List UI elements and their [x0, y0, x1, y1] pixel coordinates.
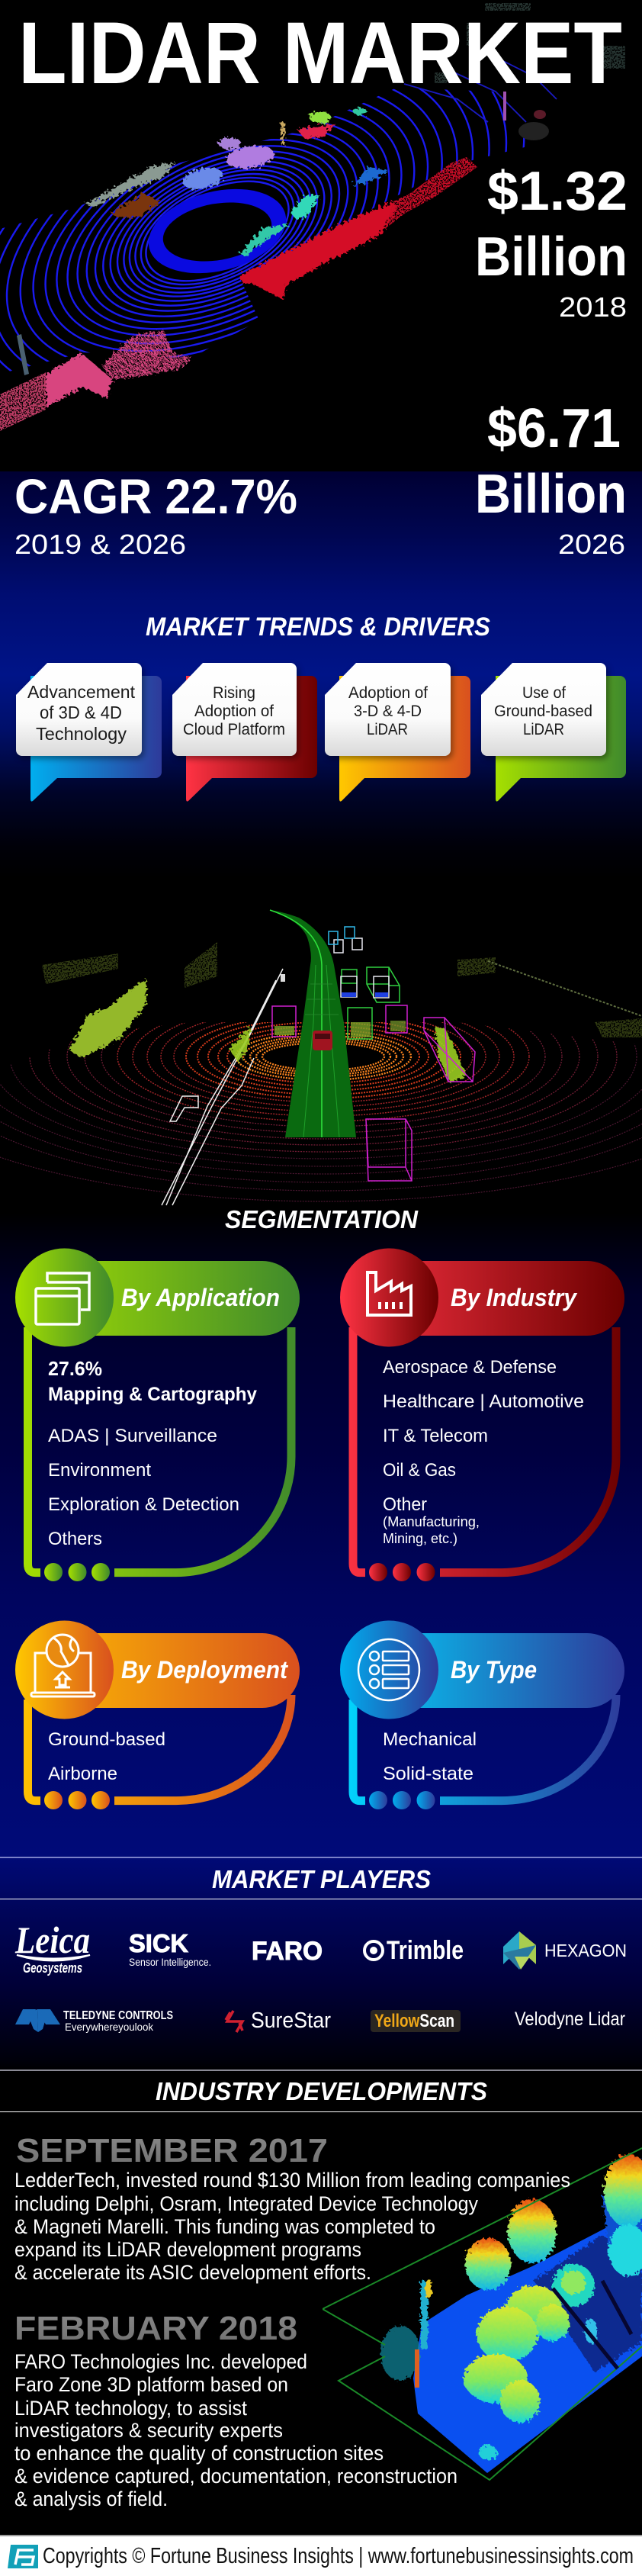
list: type segments — [383, 1729, 477, 1784]
logo: SureStar: SureStar — [251, 2008, 331, 2033]
icon: server list — [358, 1639, 419, 1700]
panel: by deployment: By Deployment — [121, 1656, 288, 1684]
lidar scene: terrain scan — [323, 2148, 642, 2480]
development: September 2017: SEPTEMBER 2017 — [16, 2132, 328, 2169]
list: industry segments: Other — [383, 1494, 427, 1515]
trend card 2 — [172, 663, 317, 802]
list: application segments: ADAS | Surveillance — [48, 1426, 217, 1446]
trend card 2: Rising — [213, 684, 255, 702]
list: industry segments: Healthcare | Automotive — [383, 1391, 584, 1412]
logo: Teledyne Controls: TELEDYNE CONTROLS — [63, 2009, 173, 2022]
development: September 2017: & Magneti Marelli. This funding was completed to — [14, 2215, 435, 2238]
stat: CAGR: CAGR 22.7% — [14, 469, 297, 524]
trend card 1 — [16, 663, 162, 802]
lidar scene: autonomous vehicle road view — [0, 910, 642, 1205]
stat: 2018 market size: 2018 — [559, 291, 627, 323]
logo: Hexagon: HEXAGON — [544, 1941, 627, 1960]
panel: by type: By Type — [451, 1656, 537, 1684]
list: industry segments: Oil & Gas — [383, 1460, 456, 1481]
logo: Trimble — [364, 1936, 464, 1965]
logo: Velodyne Lidar: Velodyne Lidar — [515, 2008, 625, 2030]
list: application segments: Others — [48, 1529, 102, 1549]
heading: industry developments: INDUSTRY DEVELOPMENTS — [156, 2077, 487, 2105]
list: application segments: Environment — [48, 1460, 151, 1481]
list: industry segments: IT & Telecom — [383, 1426, 488, 1446]
trend card 1: of 3D & 4D — [40, 703, 122, 722]
trend card 3: LiDAR — [367, 721, 408, 738]
logo: YellowScan: YellowScan — [374, 2011, 454, 2031]
stat: 2026 market size: 2026 — [558, 529, 625, 560]
stat: 2026 market size — [475, 398, 627, 560]
lidar point cloud: street top view — [0, 0, 642, 590]
stat: 2018 market size: Billion — [475, 227, 628, 288]
list: industry segments: Mining, etc.) — [383, 1531, 457, 1546]
development: February 2018: to enhance the quality of construction sites — [14, 2442, 384, 2465]
trend card 4: Use of — [522, 684, 566, 702]
development: February 2018 — [14, 2310, 457, 2510]
development: February 2018: & analysis of field. — [14, 2488, 168, 2510]
list: deployment segments — [48, 1729, 165, 1784]
trend card 3 — [325, 663, 470, 802]
development: September 2017: LedderTech, invested round $130 Million from leading companies — [14, 2169, 570, 2192]
logo: SICK: SICK — [129, 1929, 188, 1957]
list: deployment segments: Airborne — [48, 1764, 117, 1784]
development: September 2017: including Delphi, Osram, Integrated Device Technology — [14, 2192, 478, 2215]
stat: CAGR — [14, 469, 297, 560]
trend card 4 — [481, 663, 626, 802]
heading: market players: MARKET PLAYERS — [212, 1865, 431, 1893]
stat: 2018 market size — [475, 161, 628, 323]
trend card 3: 3-D & 4-D — [354, 703, 422, 720]
development: September 2017 — [14, 2132, 570, 2284]
icon: factory — [368, 1272, 411, 1315]
list: industry segments: Aerospace & Defense — [383, 1357, 557, 1378]
panel: by application: By Application — [121, 1284, 280, 1311]
list: application segments: 27.6% — [48, 1357, 102, 1380]
heading: market trends: MARKET TRENDS & DRIVERS — [146, 613, 490, 642]
footer — [0, 2535, 642, 2576]
logo: FARO: FARO — [252, 1937, 323, 1966]
development: February 2018: FARO Technologies Inc. developed — [14, 2350, 307, 2373]
list: application segments — [48, 1357, 257, 1549]
logo: SICK — [129, 1929, 211, 1968]
list: industry segments: (Manufacturing, — [383, 1514, 480, 1529]
list: industry segments — [383, 1357, 584, 1546]
trend card 4: Ground-based — [494, 703, 592, 720]
logo: Hexagon — [503, 1931, 627, 1970]
heading: segmentation: SEGMENTATION — [225, 1205, 419, 1233]
logo: Teledyne Controls: Everywhereyoulook — [65, 2021, 154, 2033]
development: February 2018: investigators & security experts — [14, 2419, 283, 2442]
trend card 2: Adoption of — [194, 703, 274, 720]
development: February 2018: FEBRUARY 2018 — [14, 2310, 297, 2347]
panel: by type — [340, 1620, 624, 1809]
stat: CAGR: 2019 & 2026 — [14, 529, 186, 560]
list: application segments: Mapping & Cartography — [48, 1384, 257, 1405]
list: deployment segments: Ground-based — [48, 1729, 165, 1750]
trend card 2: Cloud Platform — [183, 721, 285, 738]
trend card 1: Advancement — [27, 682, 136, 702]
icon: laptop with globe — [31, 1635, 95, 1696]
development: February 2018: LiDAR technology, to assist — [14, 2397, 247, 2420]
trend card 1: Technology — [36, 724, 127, 744]
logo: Trimble: Trimble — [387, 1936, 464, 1965]
stat: 2026 market size: Billion — [475, 464, 627, 525]
logo: Leica Geosystems: Geosystems — [23, 1960, 82, 1976]
panel: by application — [15, 1248, 300, 1581]
icon: browser windows — [36, 1273, 89, 1324]
trend card 4: LiDAR — [523, 721, 564, 738]
panel: by industry — [340, 1248, 624, 1581]
logo: Leica Geosystems: Leica — [14, 1918, 90, 1961]
development: February 2018: Faro Zone 3D platform based on — [14, 2373, 288, 2396]
list: application segments: Exploration & Detection — [48, 1494, 239, 1515]
stat: 2018 market size: $1.32 — [487, 161, 628, 222]
list: type segments: Mechanical — [383, 1729, 477, 1750]
trend card 3: Adoption of — [348, 684, 428, 702]
stat: 2026 market size: $6.71 — [487, 398, 621, 459]
panel: by industry: By Industry — [451, 1284, 578, 1311]
icon: Fortune Business Insights logo — [8, 2545, 38, 2568]
panel: by deployment — [15, 1620, 300, 1809]
logo: Leica Geosystems — [14, 1918, 90, 1976]
development: September 2017: & accelerate its ASIC development efforts. — [14, 2261, 371, 2284]
development: September 2017: expand its LiDAR development programs — [14, 2238, 361, 2261]
development: February 2018: & evidence captured, documentation, reconstruction — [14, 2465, 457, 2488]
logo: Teledyne Controls — [15, 2009, 173, 2033]
list: type segments: Solid-state — [383, 1764, 473, 1784]
logo: SICK: Sensor Intelligence. — [129, 1956, 211, 1968]
